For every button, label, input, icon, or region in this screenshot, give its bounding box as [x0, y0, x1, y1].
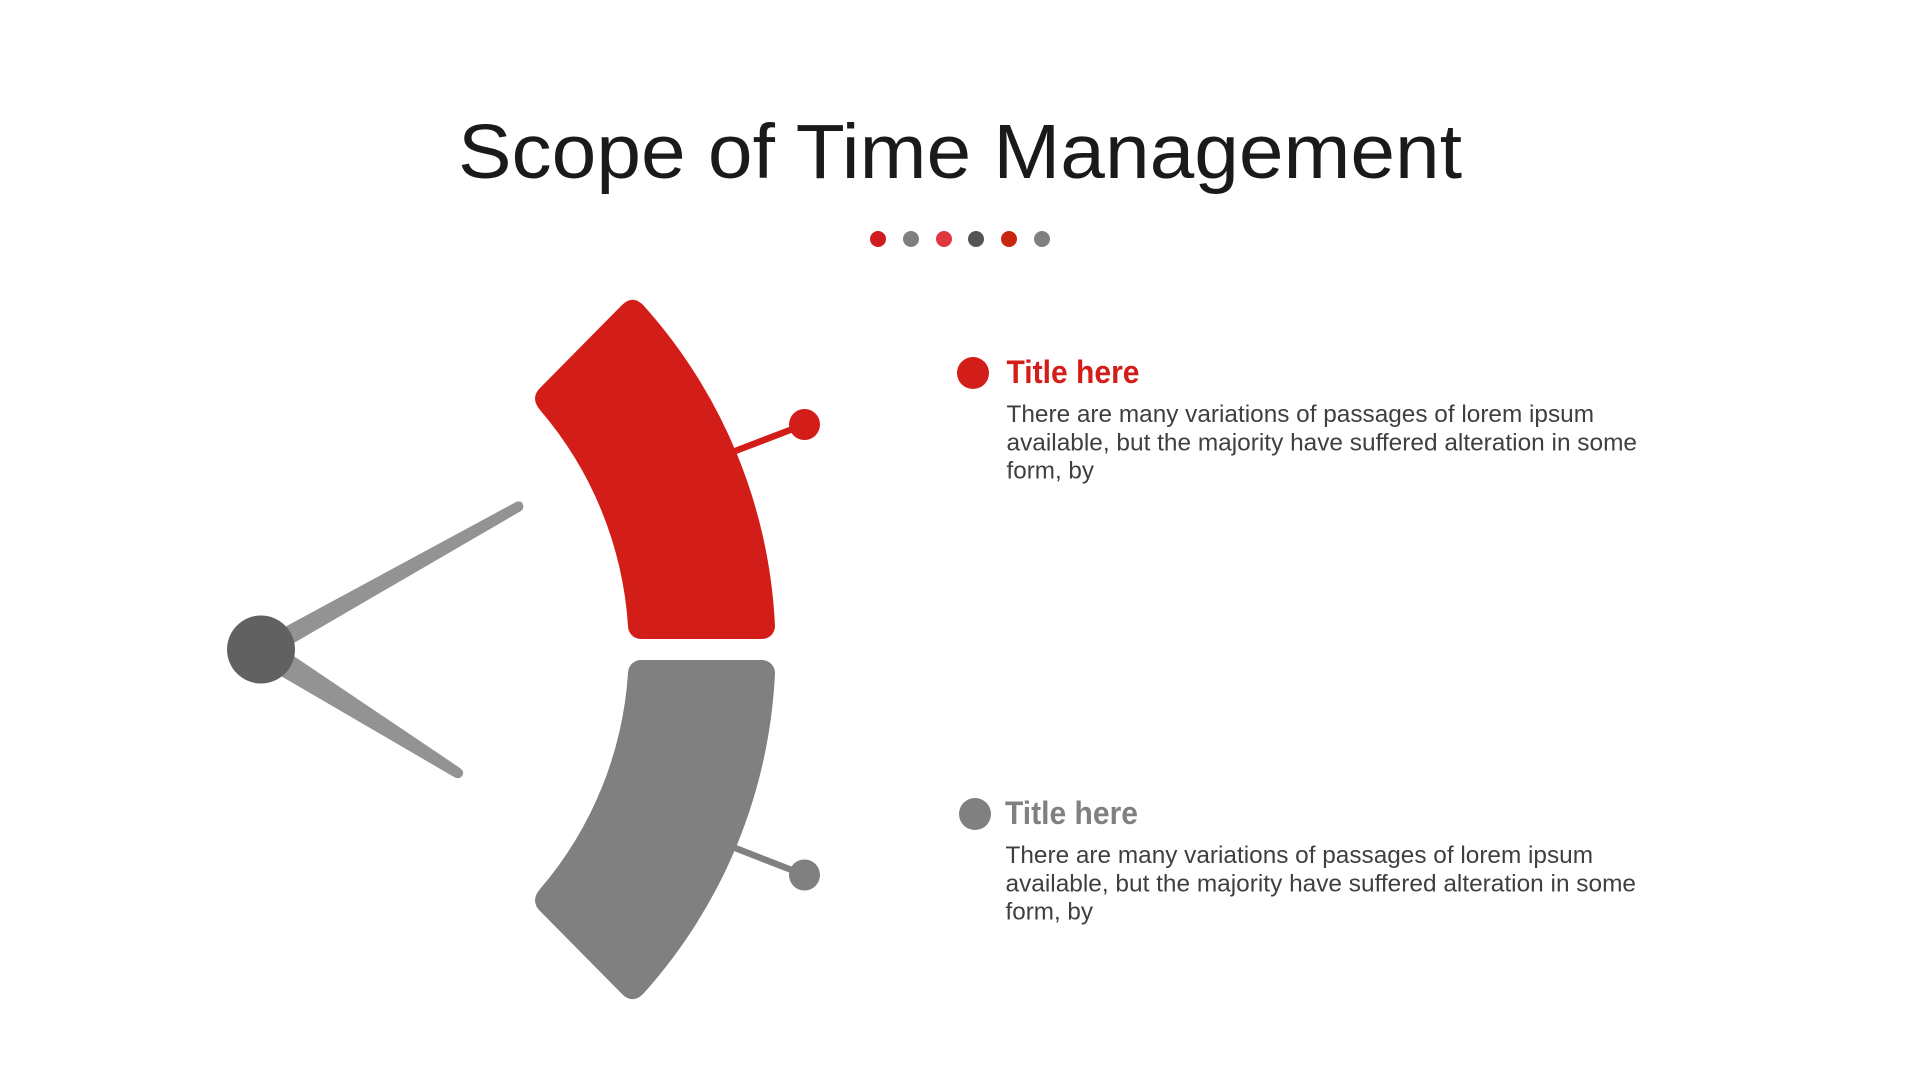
red item heading: Title here: [1006, 354, 1140, 390]
decorative dot row under title: [870, 231, 1050, 247]
first item body: available, but the majority have suffered alteration in some: [1006, 430, 1637, 456]
second item body: form, by: [1006, 898, 1093, 926]
red connector: [730, 424, 804, 453]
second item body: There are many variations of passages of lorem ipsum: [1006, 842, 1593, 869]
red connector dot: [789, 409, 820, 440]
upper red arc segment with connector: [535, 300, 820, 639]
grey bullet: [959, 798, 991, 830]
text block: second item: [959, 795, 1636, 926]
text block: first item: [957, 354, 1637, 484]
lower spoke: [262, 640, 463, 778]
second item body: [1006, 842, 1636, 926]
first item body: There are many variations of passages of lorem ipsum: [1006, 401, 1594, 428]
grey connector dot: [789, 860, 820, 890]
red arc segment: [535, 300, 775, 639]
hub with two spokes: [227, 501, 523, 778]
title: Scope of Time Management: [458, 109, 1462, 195]
red bullet: [957, 357, 989, 389]
grey connector: [730, 846, 804, 875]
grey arc segment: [535, 660, 775, 999]
grey item heading: Title here: [1005, 795, 1138, 831]
upper spoke: [270, 501, 523, 654]
first item body: [1006, 401, 1637, 484]
second item body: available, but the majority have suffered alteration in some: [1006, 870, 1636, 898]
first item body: form, by: [1006, 458, 1094, 484]
lower grey arc segment with connector: [535, 660, 820, 999]
hub circle: [227, 616, 295, 684]
